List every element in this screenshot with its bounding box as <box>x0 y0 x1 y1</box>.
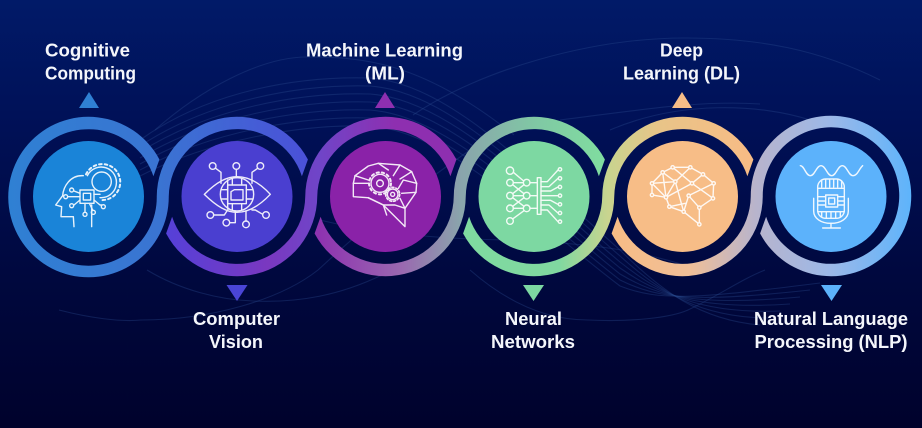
label: machine learning: Machine Learning <box>306 40 463 60</box>
label: deep learning: Deep <box>660 40 703 60</box>
label: neural networks <box>491 309 575 352</box>
segment: cognitive ring to computer vision top <box>8 117 308 277</box>
circle: computer vision <box>182 141 292 252</box>
icon: brain node network <box>650 166 715 226</box>
circle: deep learning <box>627 141 738 252</box>
circle: machine learning <box>330 141 441 252</box>
segment: deep learning bottom to nlp ring <box>612 116 911 276</box>
label: cognitive computing <box>45 40 136 84</box>
icon: neural network <box>506 167 562 224</box>
segment: neural networks bottom to deep learning top <box>463 117 753 276</box>
label: natural language processing: Processing (NLP) <box>754 332 908 352</box>
arrow: computer vision <box>226 285 248 301</box>
label: deep learning: Learning (DL) <box>623 64 740 84</box>
arrow: deep learning <box>672 92 692 108</box>
background wave lines <box>59 38 880 325</box>
icon: geometric brain with gears <box>353 163 417 227</box>
arrow: neural networks <box>523 285 544 301</box>
circle: neural networks <box>478 141 590 252</box>
icon: eye with chip <box>204 163 270 228</box>
label: neural networks: Neural <box>505 309 562 329</box>
label: deep learning <box>623 40 740 84</box>
label: computer vision: Vision <box>209 332 263 352</box>
label: computer vision <box>193 309 280 352</box>
arrow: cognitive computing <box>79 92 99 108</box>
label: cognitive computing: Computing <box>45 64 136 84</box>
label: machine learning: (ML) <box>365 64 405 84</box>
label: natural language processing <box>754 309 908 352</box>
circle: cognitive computing <box>33 141 144 252</box>
circle: natural language processing <box>776 141 886 252</box>
label: computer vision: Computer <box>193 309 280 329</box>
arrow: machine learning <box>375 92 395 108</box>
label: machine learning <box>306 40 463 84</box>
segment: computer vision bottom to machine learning top <box>166 117 456 276</box>
arrow: natural language processing <box>821 285 842 301</box>
label: neural networks: Networks <box>491 332 575 352</box>
label: natural language processing: Natural Language <box>754 309 908 329</box>
segment: machine learning bottom to neural networks top <box>315 117 605 276</box>
label: cognitive computing: Cognitive <box>45 40 130 60</box>
icon: microphone with sound wave <box>800 166 863 228</box>
icon: head with gear and chip <box>56 164 120 227</box>
